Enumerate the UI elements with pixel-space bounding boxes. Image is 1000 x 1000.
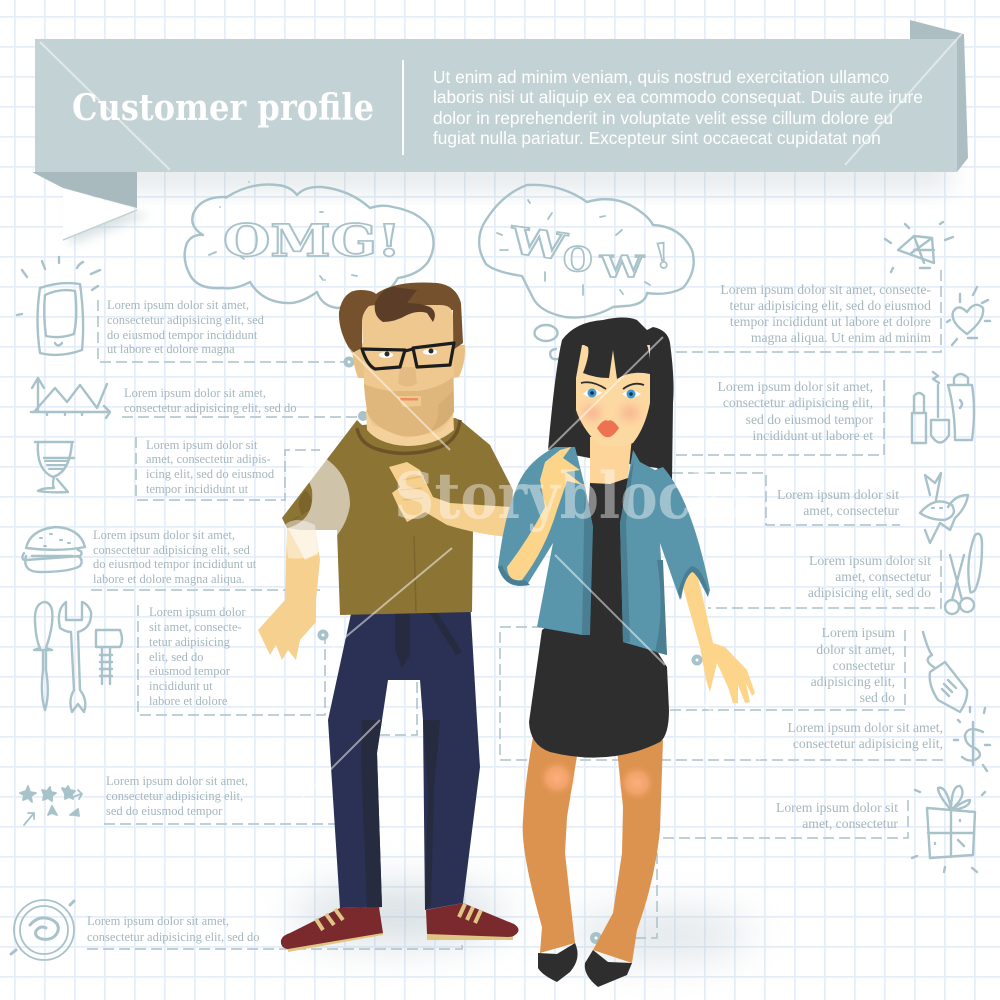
- text block left 4: labore et dolore magna aliqua.: [93, 572, 245, 586]
- connector right 2: [670, 380, 884, 455]
- woman brows and eyes: [581, 382, 644, 398]
- character: man: [258, 282, 518, 952]
- text block left 6: consectetur adipisicing elit,: [106, 789, 243, 803]
- text block left 4: consectetur adipisicing elit, sed: [93, 543, 251, 557]
- text block left 7: consectetur adipisicing elit, sed do: [87, 930, 260, 944]
- man nose: [398, 367, 417, 386]
- watermark diagonal lines: [40, 30, 965, 800]
- character: woman: [498, 318, 755, 987]
- text block left 6: Lorem ipsum dolor sit amet,: [106, 774, 248, 788]
- man right shoe: [426, 903, 518, 940]
- text block right 4: Lorem ipsum dolor sit: [809, 553, 931, 568]
- woman jacket left: [498, 447, 593, 635]
- man sweater: [282, 418, 513, 615]
- text block right 2: incididunt ut labore et: [752, 428, 873, 443]
- woman knees: [538, 759, 656, 802]
- shadow under banner: [70, 160, 950, 190]
- icon: fish and bird: [920, 473, 968, 543]
- woman far arm and hand: [680, 568, 755, 703]
- banner title: Customer profile: [72, 87, 374, 129]
- text block left 3: icing elit, sed do eiusmod: [146, 467, 275, 481]
- thought bubble: WOW: W: [506, 218, 570, 269]
- woman hair back: [548, 318, 674, 483]
- text block left 3: tempor incididunt ut: [146, 482, 249, 496]
- text block right 2: sed do eiusmod tempor: [746, 412, 873, 427]
- icon: gift box: [912, 786, 985, 872]
- text block right 1: magna aliqua. Ut enim ad minim: [751, 330, 931, 345]
- text block left 1: consectetur adipisicing elit, sed: [107, 313, 265, 327]
- banner back fold: [910, 20, 968, 172]
- text block right 7: amet, consectetur: [802, 816, 898, 831]
- thought dots: [534, 325, 558, 341]
- text block right 5: adipisicing elit,: [811, 674, 895, 689]
- text block left 5: labore et dolore: [149, 694, 228, 708]
- text block left 4: do eiusmod tempor incididunt ut: [93, 557, 257, 571]
- watermark: [40, 30, 965, 800]
- text block left 5: eiusmod tempor: [149, 664, 231, 678]
- text block right 3: amet, consectetur: [803, 503, 899, 518]
- man left shoe: [281, 907, 383, 952]
- woman right shoe: [585, 950, 632, 987]
- connector dots: [318, 356, 702, 944]
- banner divider: [402, 60, 404, 155]
- man forelock: [375, 287, 435, 322]
- thought bubble: OMG: OMG!: [223, 216, 401, 267]
- woman face: [576, 345, 650, 446]
- woman left shoe: [538, 943, 578, 982]
- text block left 3: amet, consectetur adipis-: [146, 452, 271, 466]
- text block left 5: elit, sed do: [149, 650, 204, 664]
- icon: dollar sign: [954, 707, 990, 771]
- text block left 4: Lorem ipsum dolor sit amet,: [93, 528, 235, 542]
- woman fringe: [583, 332, 650, 379]
- text block right 2: Lorem ipsum dolor sit amet,: [718, 379, 873, 394]
- icon: sketch plate: [11, 900, 74, 960]
- text block right 4: amet, consectetur: [835, 569, 931, 584]
- man mouth: [397, 396, 421, 407]
- connector right 7: [605, 800, 908, 938]
- woman jacket right: [620, 450, 710, 655]
- icon: scissors and baguette: [945, 534, 982, 614]
- icon: stars and arrows: [20, 786, 82, 825]
- man forearm and hand: [389, 462, 510, 537]
- man face: [362, 305, 454, 438]
- connector right 3: [672, 473, 900, 525]
- icon: smartphone: [17, 257, 100, 355]
- connector left 3: [136, 437, 320, 500]
- text block right 1: tetur adipisicing elit, sed do eiusmod: [730, 298, 931, 313]
- text block left 5: sit amet, consecte-: [149, 620, 242, 634]
- connector left 2: [122, 416, 362, 418]
- woman right leg: [593, 740, 663, 963]
- text block right 5: consectetur: [833, 658, 895, 673]
- connector right 5: [670, 630, 905, 710]
- man glasses: [362, 343, 454, 369]
- text block right 6: consectetur adipisicing elit,: [793, 736, 943, 751]
- woman blush: [583, 406, 639, 420]
- text block right 6: Lorem ipsum dolor sit amet,: [788, 720, 943, 735]
- icon: tools: [34, 602, 122, 712]
- text block left 6: sed do eiusmod tempor: [106, 804, 223, 818]
- jacket trim: [498, 460, 708, 655]
- text block left 5: tetur adipisicing: [149, 635, 231, 649]
- man ears: [352, 342, 465, 378]
- thought bubble: WOW: !: [652, 236, 673, 278]
- woman near arm and hand: [507, 447, 583, 580]
- thought bubble: OMG: [185, 182, 434, 308]
- banner paragraph: Ut enim ad minim veniam, quis nostrud exercitation ullamco: [433, 67, 889, 87]
- icon: diamond: [885, 222, 953, 272]
- connector left 7: [87, 935, 462, 949]
- text block right 4: adipisicing elit, sed do: [808, 585, 931, 600]
- text block right 5: dolor sit amet,: [816, 642, 895, 657]
- text block left 1: Lorem ipsum dolor sit amet,: [107, 298, 249, 312]
- text block right 1: Lorem ipsum dolor sit amet, consecte-: [720, 282, 931, 297]
- man neck and head: [339, 282, 465, 446]
- text block right 7: Lorem ipsum dolor sit: [776, 800, 898, 815]
- banner paragraph: fugiat nulla pariatur. Excepteur sint occaecat cupidatat non: [433, 128, 881, 148]
- icon: burger: [22, 527, 85, 572]
- icon: line chart: [31, 378, 110, 418]
- banner: [32, 20, 968, 245]
- icon: goblet: [35, 442, 74, 492]
- text block right 5: Lorem ipsum: [822, 625, 895, 640]
- banner body: [35, 39, 957, 172]
- connector right 4: [708, 550, 941, 608]
- text block right 5: sed do: [860, 690, 895, 705]
- watermark text: Storyblocks: [394, 459, 762, 534]
- text block right 1: tempor incididunt ut labore et dolore: [730, 314, 931, 329]
- text block left 7: Lorem ipsum dolor sit amet,: [87, 914, 229, 928]
- man hair: [339, 282, 463, 353]
- connector left 6: [104, 823, 335, 825]
- icon: heart: [947, 287, 990, 345]
- woman lips: [597, 420, 619, 437]
- text block left 5: Lorem ipsum dolor: [149, 605, 246, 619]
- left ribbon tail: [32, 172, 137, 208]
- tail shadow: [70, 200, 150, 245]
- floor shadows: [295, 887, 755, 957]
- woman left leg: [523, 737, 578, 953]
- man beard: [364, 377, 454, 436]
- man trousers: [328, 600, 480, 910]
- connector left 1: [98, 300, 345, 362]
- text block left 1: ut labore et dolore magna: [107, 342, 235, 356]
- woman dress: [529, 478, 669, 758]
- connector left 5: [138, 605, 417, 735]
- text block left 5: incididunt ut: [149, 679, 213, 693]
- banner paragraph: dolor in reprehenderit in voluptate velit esse cillum dolore eu: [433, 108, 893, 128]
- text block left 2: consectetur adipisicing elit, sed do: [124, 401, 297, 415]
- watermark logo ring: [288, 452, 350, 560]
- connector right 1: [671, 270, 941, 352]
- connector right 6: [500, 627, 943, 760]
- icon: price tag: [923, 632, 967, 712]
- banner paragraph: laboris nisi ut aliquip ex ea commodo consequat. Duis aute irure: [433, 87, 923, 107]
- icon: cosmetics: [912, 372, 974, 443]
- text block right 2: consectetur adipisicing elit,: [723, 395, 873, 410]
- thought bubble: WOW: [479, 185, 694, 359]
- connector left 4: [91, 589, 320, 591]
- woman neck: [590, 437, 632, 484]
- thought bubble: WOW: O: [563, 240, 593, 280]
- text block left 2: Lorem ipsum dolor sit amet,: [124, 386, 266, 400]
- man near arm: [258, 520, 320, 660]
- man eyes: [379, 352, 393, 358]
- text block left 3: Lorem ipsum dolor sit: [146, 438, 258, 452]
- text block left 1: do eiusmod tempor incididunt: [107, 328, 258, 342]
- text block right 3: Lorem ipsum dolor sit: [777, 487, 899, 502]
- thought bubble: WOW: W: [599, 250, 646, 285]
